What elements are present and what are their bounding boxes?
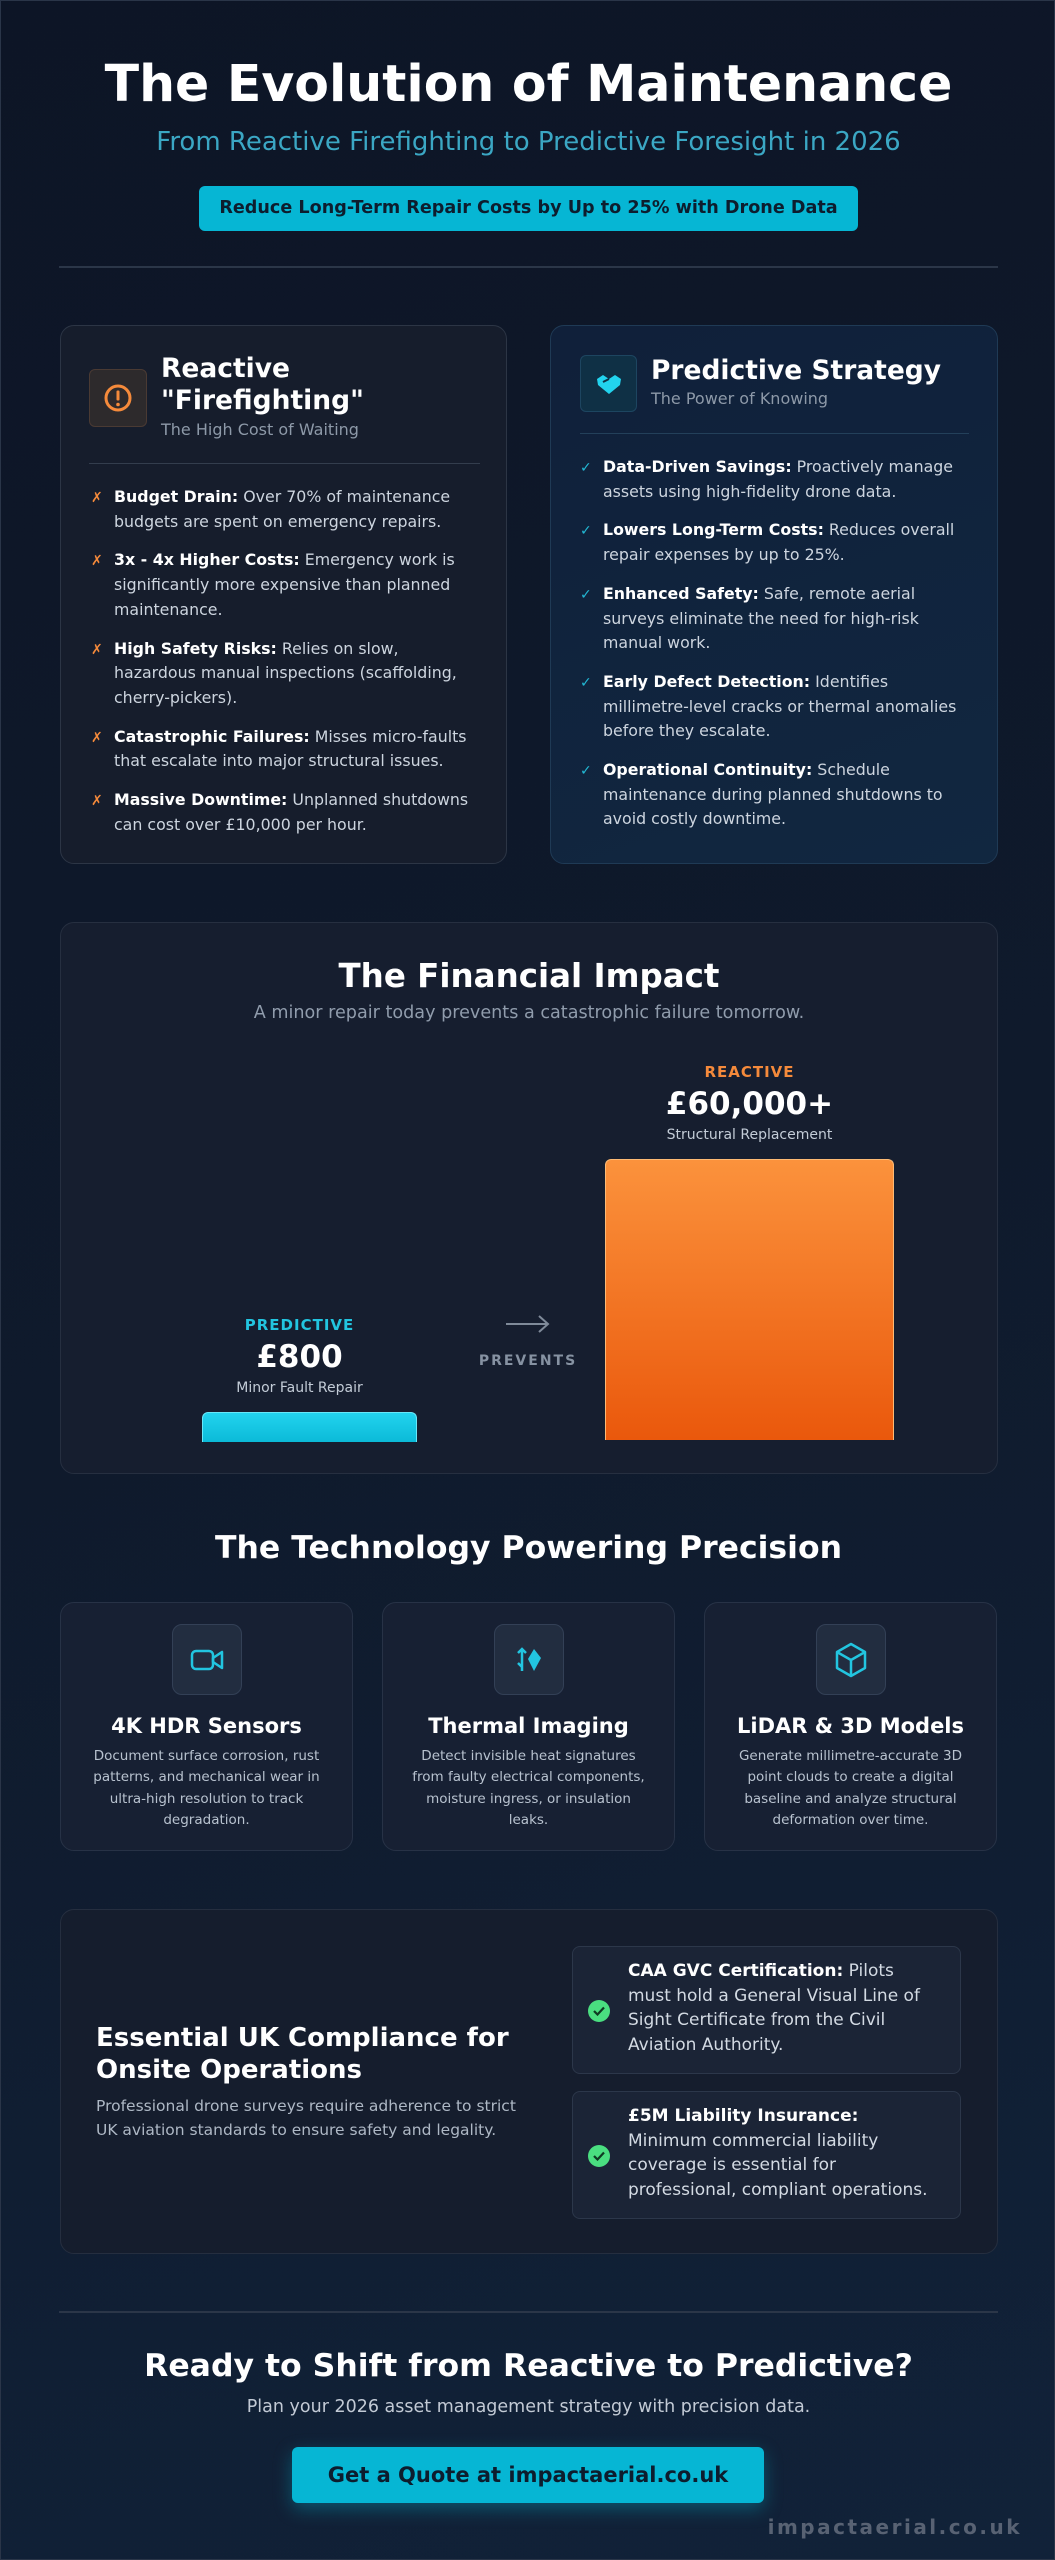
arrow: prevents — [479, 1315, 577, 1369]
card: thermal: Detect invisible heat signatures from faulty electrical components, moisture ingress, or insulation leaks. — [412, 1748, 645, 1828]
heading: "Firefighting" — [161, 385, 364, 416]
subheading: The Power of Knowing — [651, 389, 828, 408]
icon: video camera — [172, 1624, 242, 1695]
card: thermal — [382, 1602, 675, 1851]
icon: warning — [89, 369, 147, 427]
list: reactive issues: ✗ — [91, 730, 103, 746]
panel: financial impact — [60, 922, 998, 1474]
item: CAA GVC — [572, 1946, 961, 2074]
chart: predictive bar: Minor Fault Repair — [236, 1380, 363, 1396]
list: predictive benefits: ✓ — [580, 587, 592, 603]
CTA heading: Ready to Shift from Reactive to Predictive? — [144, 2348, 913, 2384]
chart: reactive bar — [605, 1063, 894, 1440]
list: predictive benefits: Lowers Long-Term Costs: Reduces overall repair expenses by up to 25%. — [603, 520, 954, 564]
heading — [161, 353, 364, 416]
card: thermal: Thermal Imaging — [428, 1714, 629, 1738]
list: reactive issues: ✗ — [91, 642, 103, 658]
icon: cube — [816, 1624, 886, 1695]
icon: handshake — [580, 355, 637, 412]
list: predictive benefits: Early Defect Detection: Identifies millimetre-level cracks or thermal anomalies before they escalate. — [603, 672, 956, 740]
CTA button — [292, 2447, 764, 2503]
list: reactive issues: ✗ — [91, 793, 103, 809]
title: The Evolution of Maintenance — [105, 54, 952, 113]
list: reactive issues: High Safety Risks: Relies on slow, hazardous manual inspections (scaffolding, cherry-pickers). — [114, 639, 457, 707]
card: 4K HDR: Document surface corrosion, rust patterns, and mechanical wear in ultra-high resolution to track degradation. — [93, 1748, 320, 1828]
list: predictive benefits: Enhanced Safety: Safe, remote aerial surveys eliminate the need for high-risk manual work. — [603, 584, 919, 652]
badge — [199, 186, 858, 231]
panel: predictive strategy — [550, 325, 998, 864]
subheading: A minor repair today prevents a catastrophic failure tomorrow. — [254, 1003, 804, 1023]
subheading: The High Cost of Waiting — [161, 420, 359, 439]
card: lidar: LiDAR & 3D Models — [737, 1714, 964, 1738]
CTA subtext: Plan your 2026 asset management strategy with precision data. — [247, 2397, 810, 2417]
chart: predictive bar — [202, 1316, 417, 1442]
list: predictive benefits: ✓ — [580, 763, 592, 779]
item: liability insurance — [572, 2091, 961, 2219]
card: 4K HDR: 4K HDR Sensors — [111, 1714, 302, 1738]
list: predictive benefits: Operational Continuity: Schedule maintenance during planned shutdowns to avoid costly downtime. — [603, 760, 943, 828]
card: lidar — [704, 1602, 997, 1851]
list: reactive issues: ✗ — [91, 553, 103, 569]
panel: reactive firefighting — [60, 325, 507, 864]
item: CAA GVC: CAA GVC Certification: Pilots must hold a General Visual Line of Sight Certificate from the Civil Aviation Authority. — [628, 1961, 920, 2055]
list: reactive issues: Catastrophic Failures: Misses micro-faults that escalate into major structural issues. — [114, 727, 467, 770]
list: predictive benefits: Data-Driven Savings: Proactively manage assets using high-fidelity drone data. — [603, 457, 953, 501]
watermark: impactaerial.co.uk — [768, 2515, 1022, 2539]
chart: predictive bar: £800 — [256, 1339, 343, 1375]
heading: technology: The Technology Powering Precision — [215, 1530, 842, 1566]
badge: Reduce Long-Term Repair Costs by Up to 25% with Drone Data — [219, 198, 838, 218]
heading: Essential UK Compliance for Onsite Operations — [96, 2023, 509, 2085]
arrow: prevents: PREVENTS — [479, 1353, 577, 1369]
heading: Predictive Strategy — [651, 355, 941, 386]
item: liability insurance: £5M Liability Insurance: Minimum commercial liability coverage is essential for professional, compliant operations. — [628, 2106, 928, 2200]
chart: reactive bar: REACTIVE — [704, 1063, 795, 1081]
icon: check — [588, 2000, 610, 2022]
description: Professional drone surveys require adherence to strict UK aviation standards to ensure safety and legality. — [96, 2097, 516, 2139]
heading: Reactive — [161, 353, 290, 384]
list: reactive issues: Budget Drain: Over 70% of maintenance budgets are spent on emergency repairs. — [114, 487, 450, 531]
list: predictive benefits: ✓ — [580, 675, 592, 691]
list: reactive issues — [91, 487, 468, 834]
CTA button: Get a Quote at impactaerial.co.uk — [328, 2463, 728, 2487]
subtitle: From Reactive Firefighting to Predictive Foresight in 2026 — [156, 127, 901, 157]
list: predictive benefits: ✓ — [580, 460, 592, 476]
list: predictive benefits: ✓ — [580, 523, 592, 539]
icon: check — [588, 2145, 610, 2167]
list: predictive benefits — [580, 457, 956, 828]
card: lidar: Generate millimetre-accurate 3D point clouds to create a digital baseline and analyze structural deformation over time. — [739, 1748, 962, 1828]
list: reactive issues: 3x - 4x Higher Costs: Emergency work is significantly more expensive than planned maintenance. — [114, 550, 455, 619]
list: reactive issues: ✗ — [91, 490, 103, 506]
chart: predictive bar: PREDICTIVE — [245, 1316, 354, 1334]
chart: reactive bar: Structural Replacement — [667, 1127, 832, 1143]
heading: The Financial Impact — [339, 957, 719, 995]
card: 4K HDR — [60, 1602, 353, 1851]
panel: UK compliance — [60, 1909, 998, 2254]
chart: reactive bar: £60,000+ — [666, 1086, 833, 1122]
icon: thermal — [494, 1624, 564, 1695]
list: reactive issues: Massive Downtime: Unplanned shutdowns can cost over £10,000 per hour. — [114, 790, 468, 834]
